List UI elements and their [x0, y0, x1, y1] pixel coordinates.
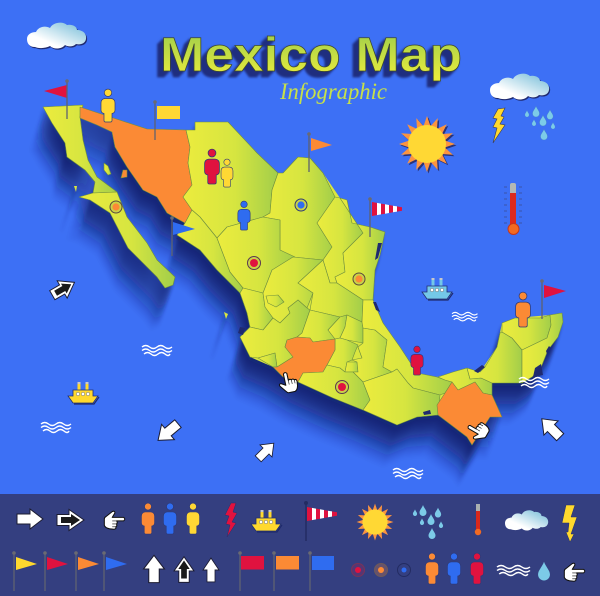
- state: Tabasco: [438, 368, 492, 395]
- legend: raindrops: [413, 505, 443, 539]
- flag: blue: [170, 216, 195, 256]
- state: Queretaro: [328, 315, 347, 339]
- icon: lightning: [493, 108, 505, 143]
- state: Jalisco: [240, 300, 310, 367]
- legend: windsock: [304, 501, 337, 541]
- legend: red flag: [43, 551, 68, 591]
- legend: yellow lightning: [562, 505, 577, 542]
- state: Durango: [217, 217, 295, 293]
- arrow: outlined: [47, 274, 80, 304]
- state: Hidalgo: [340, 315, 363, 343]
- legend: blue flag: [102, 551, 127, 591]
- legend: outlined arrow: [57, 510, 84, 530]
- legend: person orange: [141, 503, 155, 534]
- state: Zacatecas: [263, 257, 323, 323]
- legend: waves: [497, 566, 530, 576]
- legend: arrow: [17, 509, 43, 529]
- legend: thin up arrow: [203, 558, 219, 582]
- state: Campeche: [467, 332, 522, 383]
- arrow: upper left: [535, 412, 567, 444]
- state: Sonora: [80, 107, 192, 223]
- state: Yucatan: [502, 315, 551, 350]
- legend: outlined up arrow: [174, 557, 194, 582]
- island: gulf: [104, 163, 111, 175]
- legend: red lightning: [225, 503, 237, 537]
- legend: person orange: [425, 553, 439, 584]
- icon: ship yellow: [68, 382, 99, 404]
- person: yellow small: [221, 159, 233, 187]
- waves: [41, 422, 71, 432]
- person: blue: [238, 201, 250, 230]
- state: Mexico: [327, 338, 358, 372]
- legend: yellow ship: [251, 510, 282, 532]
- state: Coahuila: [263, 157, 335, 260]
- flag: windsock: [368, 197, 402, 237]
- person: red: [411, 346, 423, 375]
- state: Nuevo Leon: [317, 197, 363, 283]
- legend: orange target: [374, 564, 388, 576]
- state: Aguascalientes: [266, 295, 284, 307]
- state: Baja California: [43, 105, 117, 193]
- flag: red left: [44, 79, 69, 119]
- state: Quintana Roo: [522, 313, 563, 383]
- hand cursor: Michoacan: [277, 371, 299, 394]
- marker: orange target: [110, 201, 122, 213]
- subtitle: Infographic: [279, 79, 387, 104]
- waves: [142, 346, 172, 356]
- cloud: top right: [490, 74, 550, 101]
- legend: sun: [357, 504, 393, 540]
- title: Mexico Map: [160, 29, 462, 82]
- legend: orange flag: [74, 551, 99, 591]
- flag: yellow: [153, 100, 180, 140]
- state: San Luis Potosi: [298, 260, 363, 322]
- state: Chihuahua: [183, 122, 278, 238]
- legend: blue rectangle flag: [308, 551, 334, 591]
- cloud: top left: [27, 23, 87, 50]
- state: Nayarit: [240, 288, 273, 330]
- legend: person blue: [163, 503, 177, 534]
- legend: red target: [352, 564, 364, 576]
- legend: hand right: [564, 563, 585, 581]
- waves: [519, 378, 549, 388]
- legend: water drop: [538, 562, 550, 580]
- legend: up arrow: [144, 555, 164, 583]
- flag: orange: [307, 132, 332, 172]
- legend: yellow flag: [12, 551, 37, 591]
- state: Chiapas: [437, 382, 502, 445]
- marker: red target: [336, 380, 348, 394]
- state: Guerrero: [298, 365, 370, 410]
- legend: orange rectangle flag: [272, 551, 299, 591]
- state: Sinaloa: [177, 210, 243, 293]
- island: orange: [121, 170, 127, 178]
- icon: thermometer: [504, 183, 522, 234]
- arrow: upper right: [252, 437, 280, 465]
- legend: red rectangle flag: [238, 551, 264, 591]
- icon: sun: [399, 116, 456, 174]
- marker: orange target: [353, 273, 365, 285]
- lagoons: [176, 237, 551, 415]
- legend: blue target: [398, 564, 410, 576]
- person: red: [205, 149, 219, 184]
- legend: cloud: [505, 510, 548, 530]
- legend: hand right: [104, 511, 125, 529]
- state: Puebla: [352, 328, 392, 382]
- marker: red target: [248, 256, 260, 270]
- state: Tlaxcala: [358, 347, 372, 358]
- state: Veracruz: [362, 300, 452, 395]
- arrow: lower left: [152, 416, 184, 448]
- person: orange: [516, 292, 530, 327]
- waves: [452, 312, 478, 321]
- state: Michoacan: [273, 337, 335, 382]
- land base: [43, 105, 563, 445]
- hand cursor: Chiapas: [464, 418, 491, 443]
- legend: person red: [470, 553, 484, 584]
- legend: person yellow: [186, 503, 200, 534]
- legend panel: [0, 494, 600, 596]
- state: Oaxaca: [363, 369, 440, 425]
- map of Mexico: [43, 105, 563, 445]
- legend: thermometer: [475, 504, 481, 535]
- state: Baja California Sur: [79, 192, 175, 288]
- icon: ship blue: [422, 278, 453, 300]
- marker: blue target: [295, 199, 307, 211]
- person: yellow: [101, 89, 115, 122]
- map shadow: [29, 108, 562, 487]
- icon: raindrops: [525, 106, 555, 140]
- state: Tamaulipas: [335, 198, 385, 300]
- state: Colima: [258, 353, 277, 367]
- legend: person blue: [447, 553, 461, 584]
- flag: red: [540, 279, 566, 319]
- state: Guanajuato: [297, 310, 340, 342]
- state: Morelos: [345, 362, 358, 372]
- waves: [393, 468, 423, 478]
